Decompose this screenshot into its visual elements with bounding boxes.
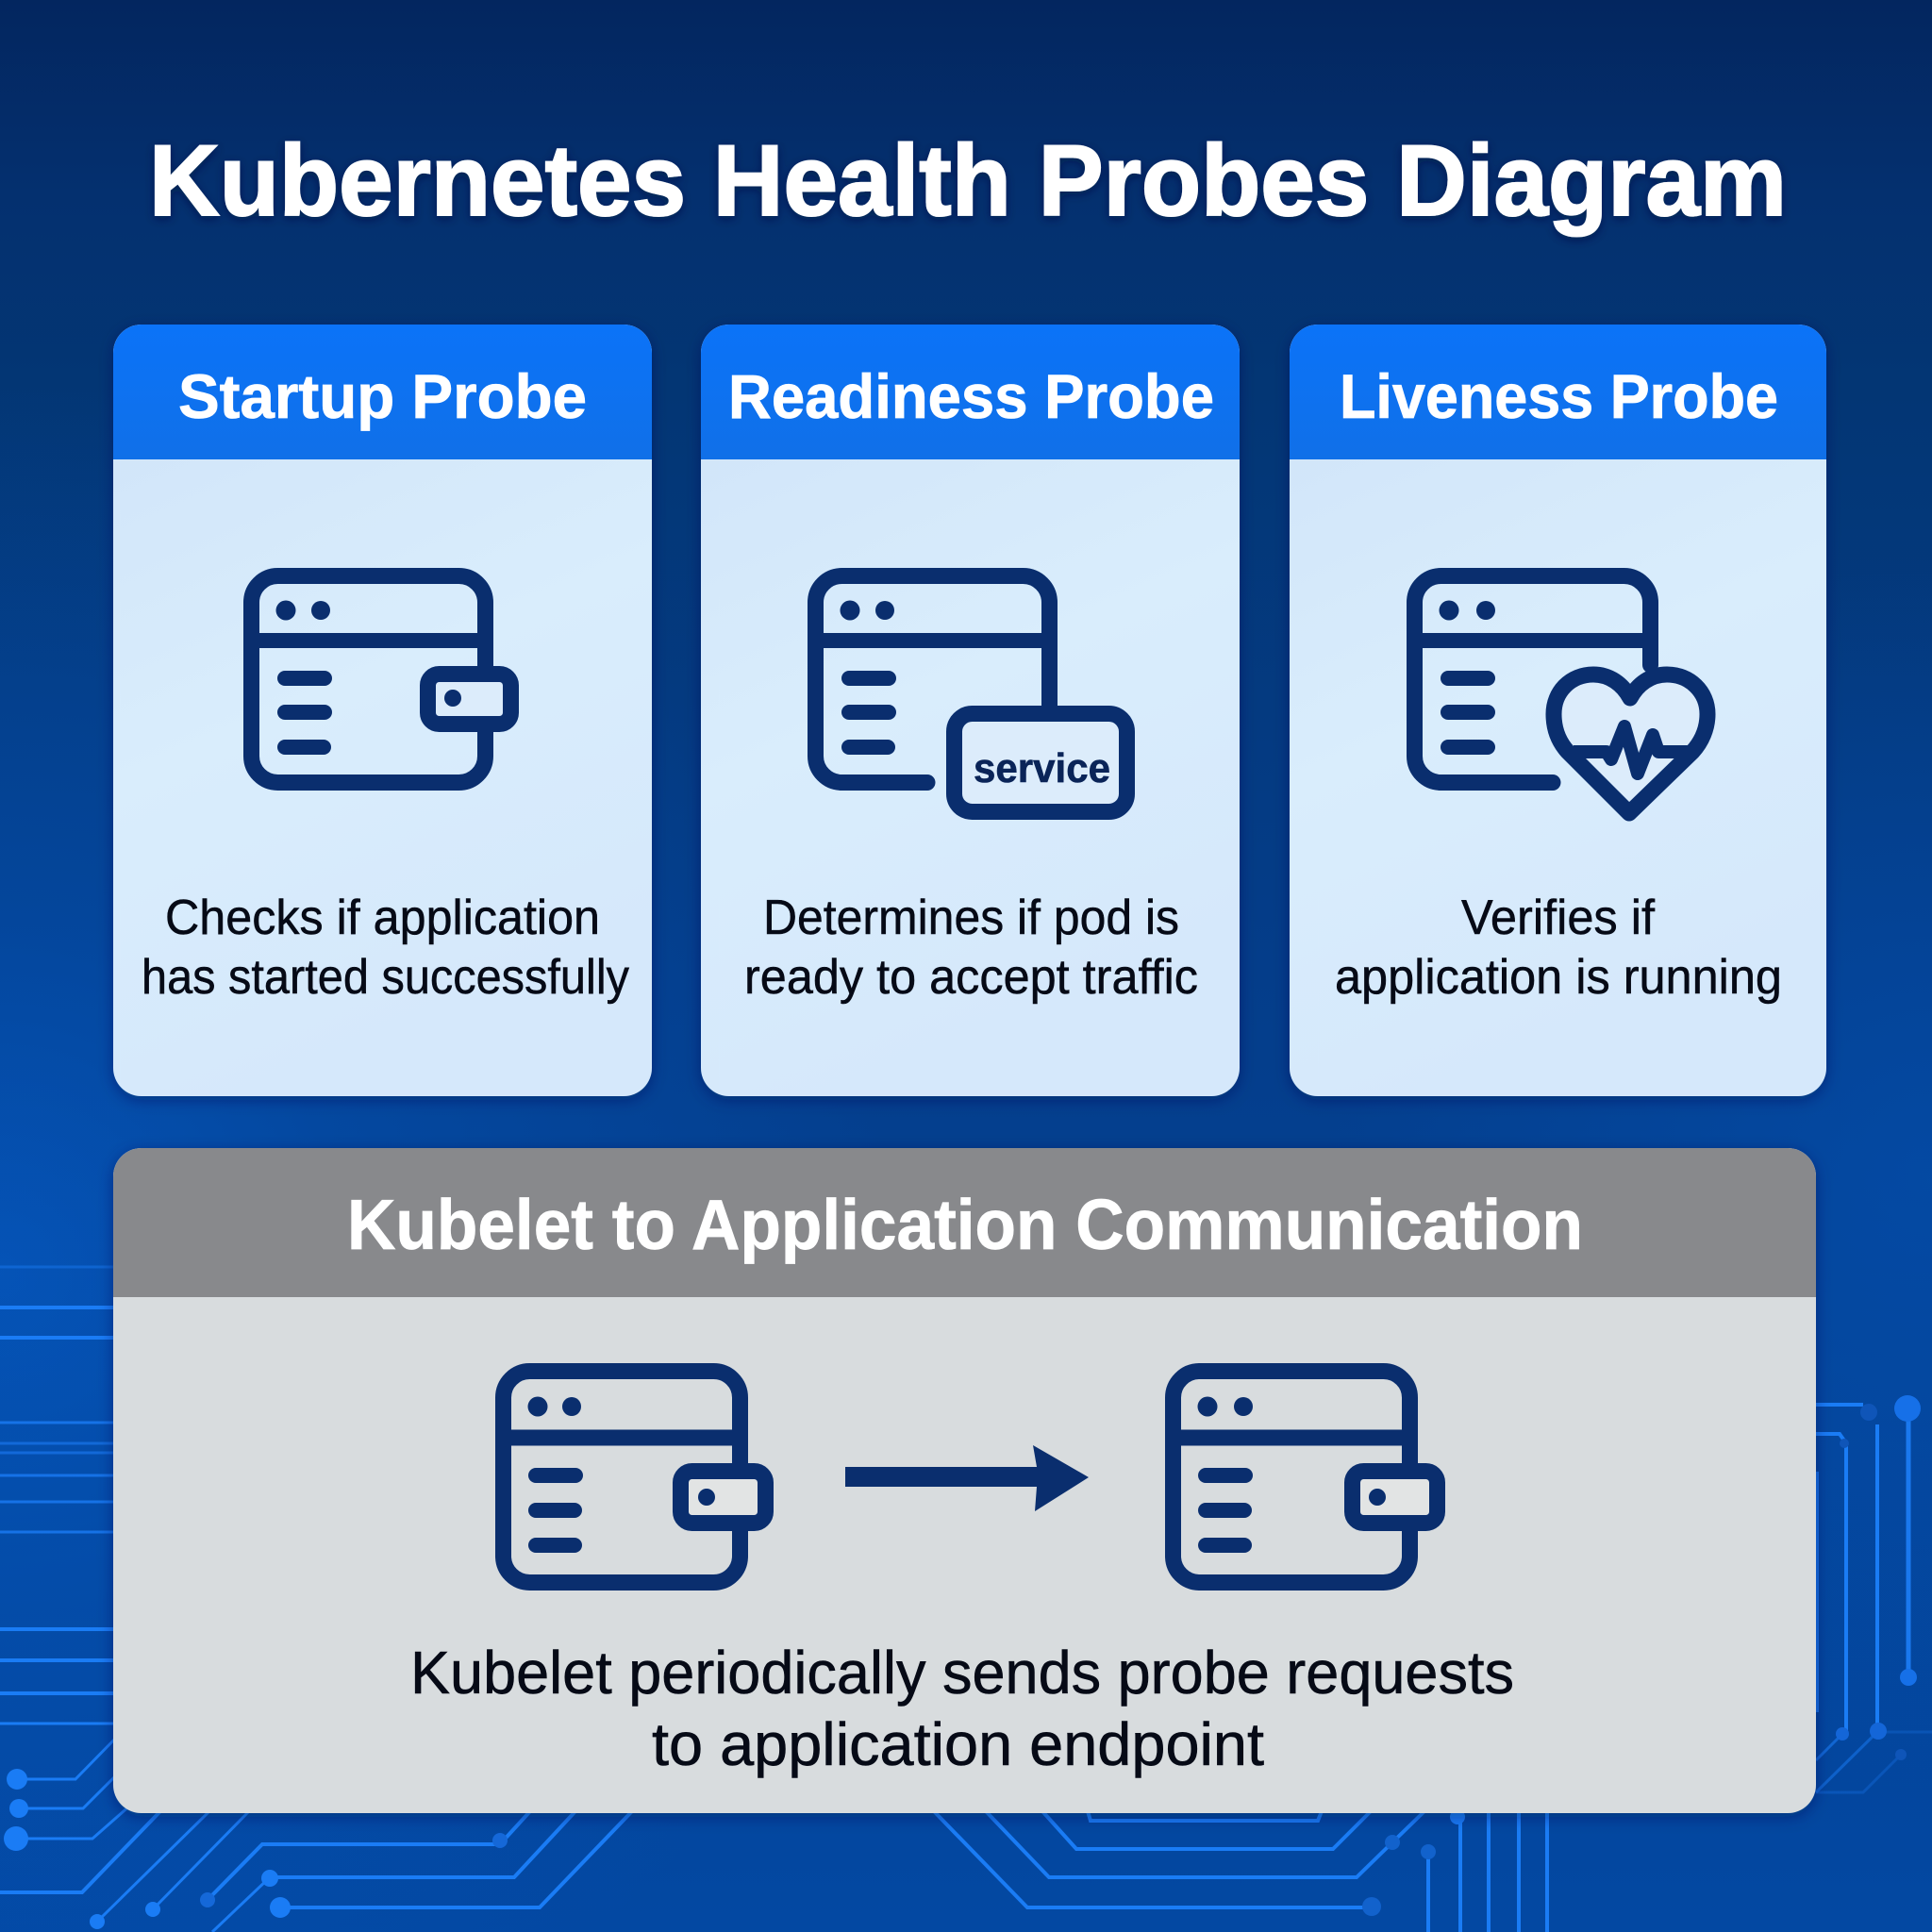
heading: kubelet to application communication: Kubelet to Application Communication <box>347 1185 1583 1264</box>
circuit board decoration: left side <box>0 1267 632 1932</box>
description: kubelet communication: to application endpoint <box>652 1710 1264 1778</box>
description: startup probe: Checks if application <box>165 891 600 945</box>
circuit board decoration: bottom centre <box>934 1809 1547 1932</box>
panel: kubelet to application communication <box>113 1148 1816 1813</box>
icon: source application window <box>503 1372 766 1583</box>
description: readiness probe: ready to accept traffic <box>744 950 1198 1005</box>
panel: liveness probe <box>1290 325 1826 1096</box>
heading: startup probe: Startup Probe <box>178 361 587 431</box>
arrow: kubelet to application <box>845 1445 1089 1511</box>
icon label: service: service <box>974 745 1110 791</box>
icon: application window with heartbeat <box>1414 575 1707 813</box>
description: startup probe: has started successfully <box>142 950 629 1005</box>
icon: target application window <box>1173 1372 1438 1583</box>
description: liveness probe: application is running <box>1335 950 1782 1005</box>
circuit board decoration: right side <box>1816 1395 1932 1792</box>
circuit board decoration: left nodes <box>4 1769 508 1929</box>
title: Kubernetes Health Probes Diagram <box>149 124 1787 237</box>
icon: application window with small tag <box>251 575 511 783</box>
panel: readiness probe <box>701 325 1240 1096</box>
icon: application window with service box <box>815 575 1126 811</box>
description: kubelet communication: Kubelet periodically sends probe requests <box>410 1639 1514 1707</box>
heading: readiness probe: Readiness Probe <box>728 361 1214 431</box>
description: liveness probe: Verifies if <box>1461 891 1656 945</box>
panel: startup probe <box>113 325 652 1096</box>
description: readiness probe: Determines if pod is <box>763 891 1179 945</box>
heading: liveness probe: Liveness Probe <box>1340 361 1778 431</box>
